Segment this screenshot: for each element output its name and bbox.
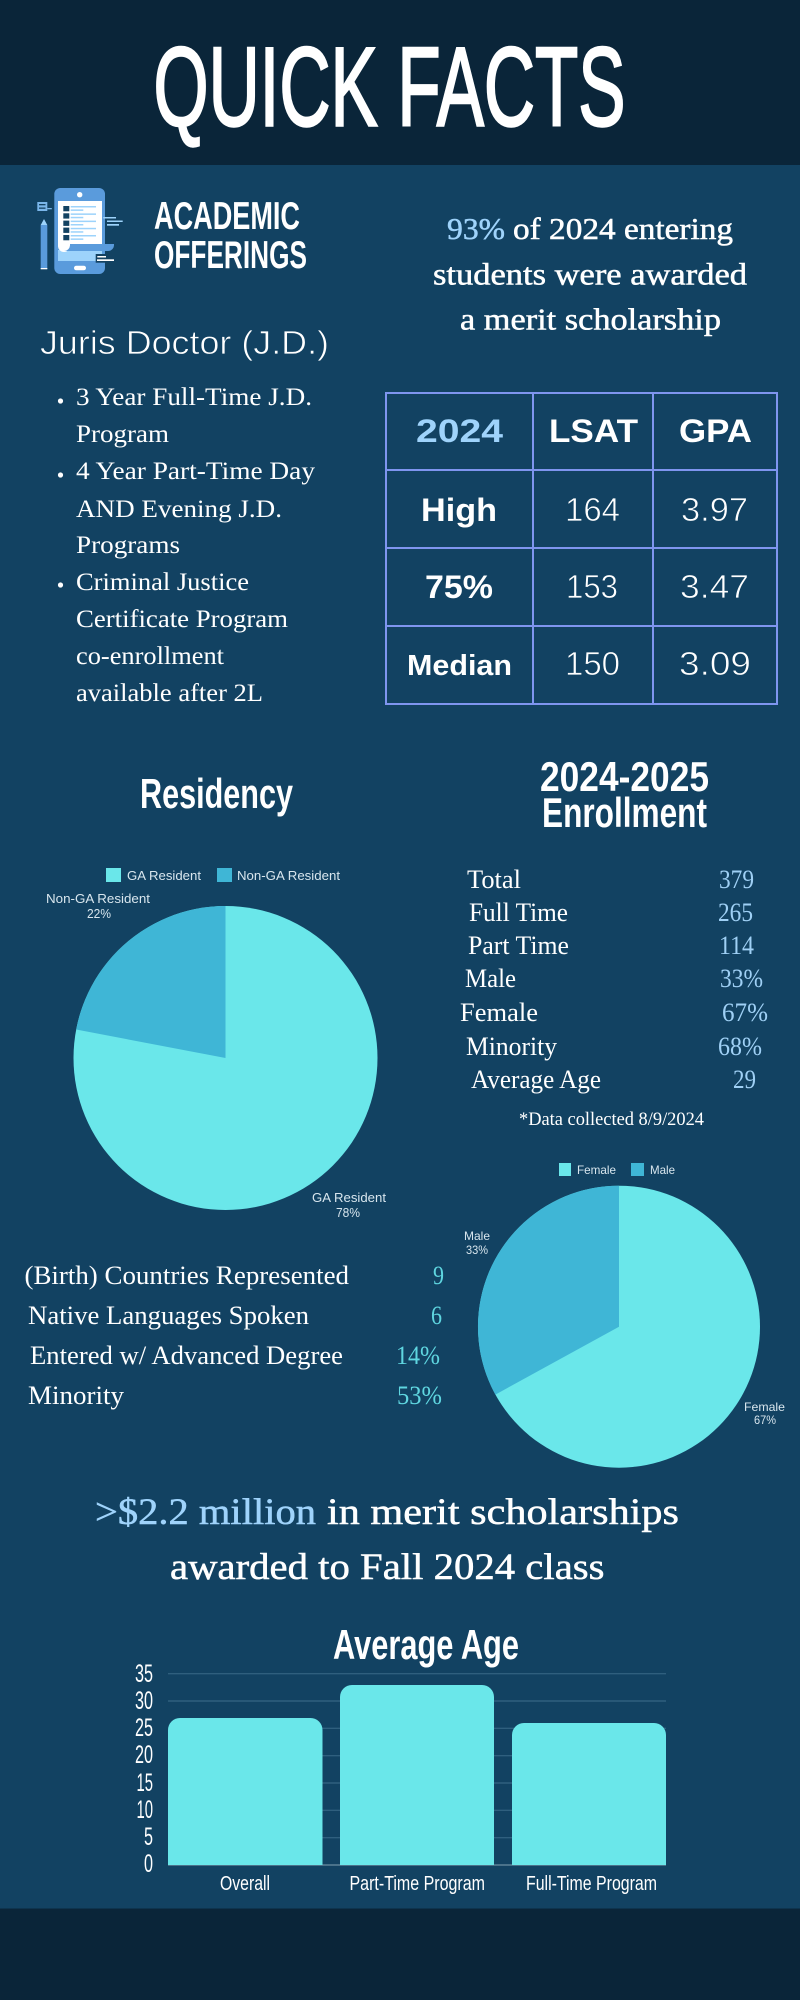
list: residency stats: 53%: [397, 1381, 442, 1410]
table: LSAT and GPA: GPA: [679, 413, 752, 449]
bar: overall: [168, 1718, 322, 1865]
list: enrollment stats: 379: [719, 865, 754, 894]
table: LSAT and GPA: 75%: [425, 569, 493, 605]
y axis labels: 5: [144, 1823, 153, 1851]
chart: residency pie: Non-GA Resident: [46, 891, 150, 906]
list: enrollment stats: 67%: [722, 998, 768, 1027]
bar: full-time program: [512, 1723, 666, 1865]
table: LSAT and GPA: 3.47: [680, 568, 749, 605]
y axis labels: 0: [144, 1850, 153, 1878]
heading: academic offerings: ACADEMIC: [154, 195, 300, 238]
y axis labels: 35: [135, 1660, 153, 1688]
legend: residency: GA Resident: [127, 868, 201, 883]
chart: gender pie: Female: [744, 1400, 785, 1414]
list: programs: co-enrollment: [76, 643, 224, 670]
callout: merit scholarships total: >$2.2 million: [95, 1492, 316, 1533]
heading: enrollment: 2024-2025: [540, 753, 709, 800]
chart: residency pie: [46, 868, 386, 1220]
list: enrollment stats: 68%: [718, 1032, 762, 1061]
panel: academic offerings: [37, 188, 329, 707]
callout: merit scholarship 93%: [433, 211, 748, 336]
table: LSAT and GPA: [386, 393, 777, 704]
table: LSAT and GPA: Median: [407, 650, 512, 682]
table: LSAT and GPA: 3.97: [681, 491, 748, 528]
list: residency stats: [24, 1261, 444, 1410]
legend: residency: Non-GA Resident: [237, 868, 340, 883]
callout: merit scholarships total: [95, 1492, 679, 1588]
y axis labels: 20: [135, 1741, 153, 1769]
list: enrollment stats: [460, 865, 768, 1094]
list: programs: AND Evening J.D.: [76, 496, 282, 523]
list: residency stats: (Birth) Countries Represented: [24, 1261, 349, 1290]
list: programs: [58, 384, 316, 707]
list: residency stats: Minority: [28, 1381, 124, 1410]
y axis labels: 15: [136, 1769, 153, 1797]
list: enrollment stats: Full Time: [469, 898, 568, 927]
y axis labels: [135, 1660, 153, 1878]
list: enrollment stats: Average Age: [471, 1065, 601, 1094]
chart: gender pie: Male: [464, 1229, 490, 1243]
list: enrollment stats: 29: [733, 1065, 756, 1094]
subheading: juris doctor: Juris Doctor (J.D.): [40, 324, 329, 361]
list: programs: available after 2L: [76, 680, 263, 707]
list: residency stats: 14%: [396, 1341, 440, 1370]
list: enrollment stats: 114: [719, 931, 754, 960]
y axis labels: 10: [136, 1796, 153, 1824]
legend: gender: [559, 1163, 675, 1177]
callout: merit scholarship 93%: 93%: [447, 211, 505, 246]
x axis labels: Full-Time Program: [526, 1873, 657, 1895]
header band: [0, 0, 800, 165]
chart: residency pie: 78%: [336, 1205, 360, 1220]
table: LSAT and GPA: 153: [566, 568, 618, 605]
callout: merit scholarships total: awarded to Fall 2024 class: [170, 1547, 604, 1588]
chart: gender pie: 67%: [754, 1413, 776, 1427]
x axis labels: Part-Time Program: [350, 1873, 485, 1895]
table: LSAT and GPA: 2024: [416, 413, 503, 449]
list: enrollment stats: Female: [460, 998, 538, 1027]
table: LSAT and GPA: 150: [565, 645, 620, 682]
list: programs: 4 Year Part-Time Day: [76, 458, 316, 485]
icon: phone checklist: [37, 188, 123, 274]
list: enrollment stats: Male: [465, 964, 516, 993]
list: programs: Program: [76, 421, 170, 448]
table: LSAT and GPA: 3.09: [679, 645, 751, 682]
list: enrollment stats: 33%: [720, 964, 763, 993]
y axis labels: 30: [135, 1687, 153, 1715]
bar: part-time program: [340, 1685, 494, 1865]
chart: gender pie: [464, 1163, 785, 1468]
footer band: [0, 1908, 800, 2000]
list: programs: Certificate Program: [76, 606, 289, 633]
table: LSAT and GPA: LSAT: [549, 413, 638, 449]
heading: average age: Average Age: [333, 1621, 519, 1668]
list: programs: 3 Year Full-Time J.D.: [76, 384, 312, 411]
chart: gender pie: 33%: [466, 1243, 488, 1257]
chart: residency pie: GA Resident: [312, 1190, 386, 1205]
legend: gender: Female: [577, 1163, 616, 1177]
chart: residency pie: 22%: [87, 906, 111, 921]
list: programs: Criminal Justice: [76, 569, 249, 596]
x axis labels: Overall: [220, 1873, 270, 1895]
legend: gender: Male: [650, 1163, 675, 1177]
callout: merit scholarship 93%: a merit scholarship: [460, 302, 721, 336]
list: enrollment stats: Total: [467, 865, 521, 894]
heading: academic offerings: OFFERINGS: [154, 234, 307, 277]
list: residency stats: 9: [433, 1261, 444, 1290]
table: LSAT and GPA: High: [421, 492, 497, 528]
list: residency stats: Entered w/ Advanced Degree: [30, 1341, 343, 1370]
list: enrollment stats: Part Time: [468, 931, 569, 960]
y axis labels: 25: [135, 1714, 153, 1742]
heading: residency: Residency: [140, 770, 293, 817]
heading: enrollment: [540, 753, 709, 836]
x axis labels: [220, 1873, 657, 1895]
callout: merit scholarship 93%: students were awarded: [433, 256, 748, 292]
callout: merit scholarship 93%: of 2024 entering: [513, 211, 733, 246]
legend: residency: [106, 868, 340, 883]
list: residency stats: Native Languages Spoken: [28, 1301, 309, 1330]
chart: average age bars: [135, 1660, 666, 1895]
table: LSAT and GPA: 164: [565, 491, 620, 528]
list: enrollment stats: 265: [718, 898, 753, 927]
list: residency stats: 6: [431, 1301, 442, 1330]
list: programs: Programs: [76, 532, 180, 559]
heading: academic offerings: [154, 195, 307, 277]
callout: merit scholarships total: in merit scholarships: [327, 1492, 679, 1533]
list: enrollment stats: Minority: [466, 1032, 557, 1061]
note: data collected: *Data collected 8/9/2024: [519, 1109, 704, 1130]
heading: enrollment: Enrollment: [542, 789, 707, 836]
